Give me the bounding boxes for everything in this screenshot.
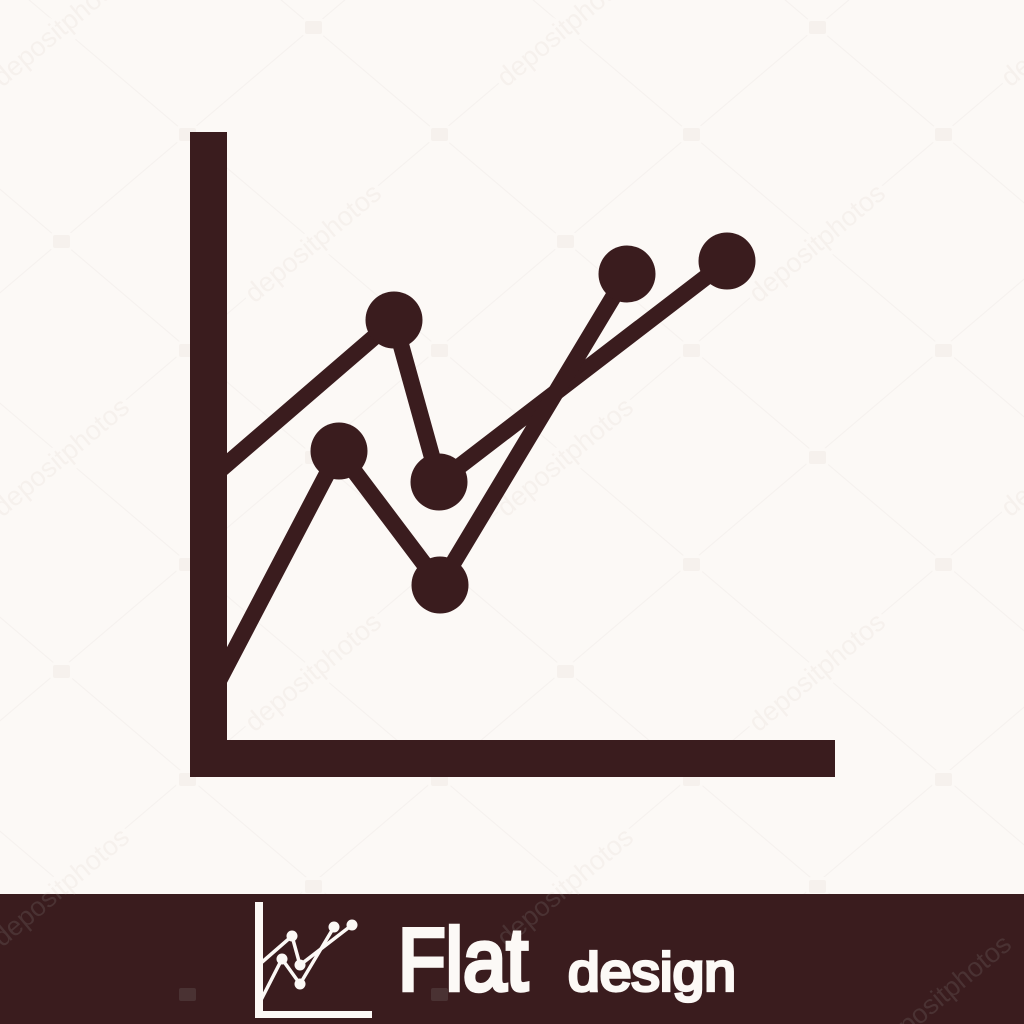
- footer banner: [0, 894, 1024, 1024]
- infographic canvas: depositphotos: [491, 822, 639, 952]
- infographic canvas: depositphotos: [239, 607, 387, 737]
- icon: small line chart: [255, 902, 372, 1018]
- icon: main line chart: [190, 132, 835, 777]
- infographic canvas: depositphotos: [743, 178, 891, 308]
- infographic canvas: depositphotos: [743, 607, 891, 737]
- footer banner: depositphotos: [491, 822, 639, 952]
- banner title: Flat: Flat: [398, 910, 528, 1009]
- upper series data points: [366, 232, 756, 510]
- infographic canvas: depositphotos: [491, 392, 639, 522]
- chart axes: [190, 132, 835, 777]
- upper data series line: [205, 261, 727, 483]
- lower data series line: [205, 274, 627, 707]
- banner subtitle: design: design: [568, 942, 736, 1002]
- lower series data points: [310, 246, 656, 614]
- infographic canvas: depositphotos: [239, 178, 387, 308]
